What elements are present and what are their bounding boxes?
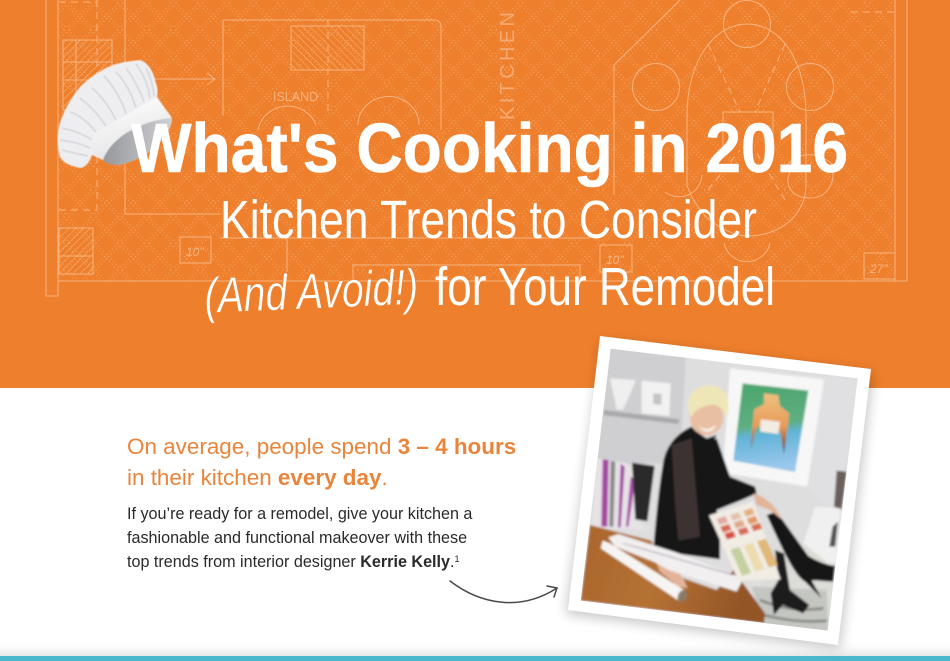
side wall dark piece [834, 471, 847, 510]
subtitle remainder: for Your Remodel [435, 257, 775, 317]
title: What's Cooking in 2016 [131, 109, 848, 187]
handwritten aside: (And Avoid!) [203, 259, 419, 324]
rolled plans [608, 534, 742, 592]
kitchen blueprint background: ISLAND [273, 90, 318, 104]
floor [804, 544, 828, 564]
hands [753, 493, 782, 519]
poster [723, 368, 824, 487]
rug [752, 587, 828, 632]
kitchen blueprint background: 10" [186, 245, 204, 259]
intro highlight text [127, 434, 516, 490]
boots [767, 512, 835, 598]
white intro background [0, 388, 950, 656]
intro body text: 1 [454, 554, 460, 564]
kitchen blueprint background: 27" [869, 262, 888, 276]
arrow to photo [450, 581, 557, 603]
intro body text: top trends from interior designer Kerrie Kelly. [127, 553, 454, 571]
photo content [573, 343, 867, 637]
photo shadow [566, 340, 873, 649]
table [581, 525, 765, 623]
colour swatches [709, 502, 781, 581]
intro body text: fashionable and functional makeover with these [127, 529, 467, 547]
intro highlight text: in their kitchen every day. [127, 465, 388, 490]
striped chair [594, 458, 637, 527]
intro highlight text: On average, people spend 3 – 4 hours [127, 434, 516, 459]
intro body text: If you’re ready for a remodel, give your kitchen a [127, 505, 472, 523]
black book [632, 463, 655, 521]
orange header banner [0, 0, 950, 388]
photo frame [568, 336, 871, 645]
shadow above teal strip [0, 640, 950, 656]
photo of designer Kerrie Kelly [566, 336, 873, 649]
teal footer strip [0, 656, 950, 661]
subtitle line two [203, 257, 775, 324]
woman jacket [653, 427, 757, 560]
kitchen blueprint background: 10" [606, 253, 624, 267]
icon: chef's hat [58, 60, 172, 168]
love shelf [603, 410, 679, 424]
kitchen blueprint background: KITCHEN [497, 12, 519, 120]
subtitle line one: Kitchen Trends to Consider [220, 190, 757, 250]
white chair [803, 507, 841, 563]
kitchen blueprint background [46, 0, 907, 296]
intro body text [127, 505, 472, 571]
face and hair [690, 399, 723, 435]
